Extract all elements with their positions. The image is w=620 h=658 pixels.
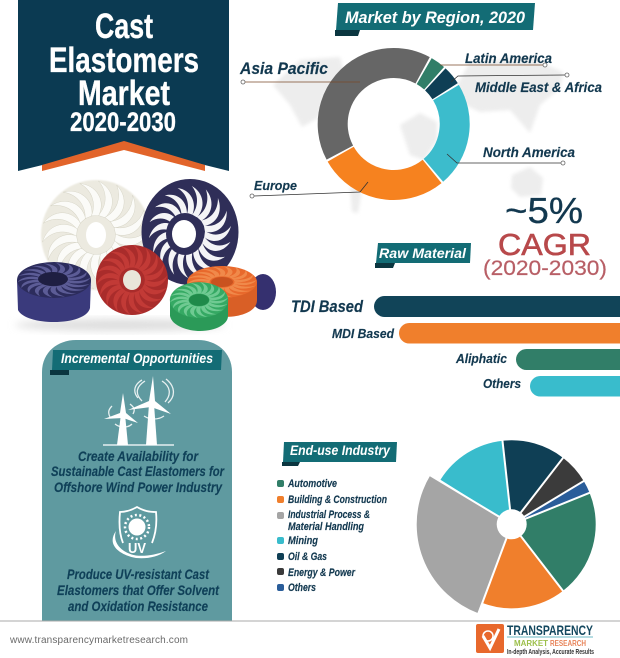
legend: Industrial Process & Material Handling: Industrial Process & — [288, 509, 370, 521]
text: wind power opportunity: Sustainable Cast Elastomers for — [51, 463, 225, 479]
CAGR callout — [483, 190, 607, 280]
bar: Others: Others — [483, 376, 521, 391]
product photo: cast elastomer wheels — [15, 179, 276, 331]
banner chevron — [42, 141, 205, 171]
legend: Industrial Process & Material Handling — [277, 509, 370, 533]
logo: Transparency Market Research: TRANSPARENCY — [507, 622, 593, 638]
bar chart: raw material — [291, 296, 620, 396]
heading: Raw Material: Raw Material — [379, 245, 467, 261]
logo: Transparency Market Research — [476, 622, 594, 656]
heading: Incremental Opportunities: Incremental Opportunities — [61, 350, 213, 366]
label: Asia Pacific: Asia Pacific — [239, 59, 328, 78]
legend: end-use industry — [277, 478, 387, 594]
dark blue back wheel — [250, 274, 276, 310]
legend: Others: Others — [288, 582, 316, 594]
bar: MDI Based: MDI Based — [332, 326, 395, 341]
footer url: www.transparencymarketresearch.com — [9, 635, 188, 646]
label: Europe: Europe — [254, 178, 297, 193]
region labels and leader lines — [239, 50, 602, 198]
logo: Transparency Market Research: MARKET — [514, 639, 548, 648]
bar: TDI Based: TDI Based — [291, 297, 364, 316]
title banner — [18, 0, 229, 171]
label: North America: North America — [483, 144, 575, 160]
bar: Others — [483, 376, 620, 396]
text: wind power opportunity: Create Availability for — [78, 448, 199, 464]
bar: Aliphatic: Aliphatic — [455, 351, 508, 366]
icon: UV shield — [113, 507, 166, 558]
text: wind power opportunity — [51, 448, 225, 495]
label: Middle East & Africa — [451, 73, 602, 95]
bar: Aliphatic — [455, 349, 620, 370]
label: Europe — [250, 178, 368, 198]
heading: End-use Industry: End-use Industry — [290, 442, 391, 458]
bar: MDI Based — [332, 323, 620, 344]
bar: TDI Based — [291, 296, 620, 317]
white wheel — [40, 179, 152, 291]
heading: Incremental Opportunities — [50, 350, 222, 375]
label: North America — [447, 144, 575, 165]
title: 2020-2030 — [70, 107, 176, 137]
title — [49, 7, 199, 137]
heading: Market by Region: Market by Region, 2020 — [345, 8, 526, 27]
legend: Building & Construction: Building & Construction — [288, 494, 387, 506]
CAGR callout: ~5% — [505, 190, 583, 231]
blue cylinder — [16, 262, 92, 322]
logo icon — [476, 624, 504, 653]
text: UV resistance opportunity: and Oxidation Resistance — [68, 598, 208, 614]
navy spoked wheel — [142, 179, 238, 285]
donut chart: market by region — [307, 38, 480, 210]
orange wheel — [186, 265, 258, 317]
legend: Mining: Mining — [288, 535, 318, 547]
logo: Transparency Market Research: RESEARCH — [550, 639, 586, 648]
green wheel — [169, 281, 229, 331]
panel: incremental opportunities — [42, 340, 232, 621]
red wheel — [95, 244, 169, 316]
world map backdrop — [273, 57, 563, 213]
title: Market — [78, 74, 170, 113]
heading: End-use Industry — [282, 442, 397, 466]
pie chart: end-use industry — [426, 425, 604, 618]
title: Elastomers — [49, 41, 199, 80]
legend: Energy & Power: Energy & Power — [288, 567, 356, 579]
legend: Automotive: Automotive — [287, 478, 337, 490]
label: Latin America: Latin America — [465, 50, 552, 66]
text: wind power opportunity: Offshore Wind Power Industry — [54, 479, 223, 495]
CAGR callout: (2020-2030) — [483, 257, 607, 280]
text: UV resistance opportunity — [57, 566, 220, 614]
text: UV resistance opportunity: Elastomers that Offer Solvent — [57, 582, 220, 598]
icon: UV shield: UV — [128, 540, 146, 557]
label: Middle East & Africa: Middle East & Africa — [475, 79, 602, 95]
CAGR callout: CAGR — [498, 227, 591, 262]
legend: Oil & Gas: Oil & Gas — [288, 551, 327, 563]
legend: Industrial Process & Material Handling: Material Handling — [288, 521, 364, 533]
icon: wind turbines — [103, 376, 174, 445]
heading: Raw Material — [375, 243, 471, 268]
text: UV resistance opportunity: Produce UV-resistant Cast — [67, 566, 210, 582]
label: Asia Pacific — [239, 59, 360, 84]
title: Cast — [95, 7, 153, 46]
heading: Market by Region — [335, 3, 535, 36]
